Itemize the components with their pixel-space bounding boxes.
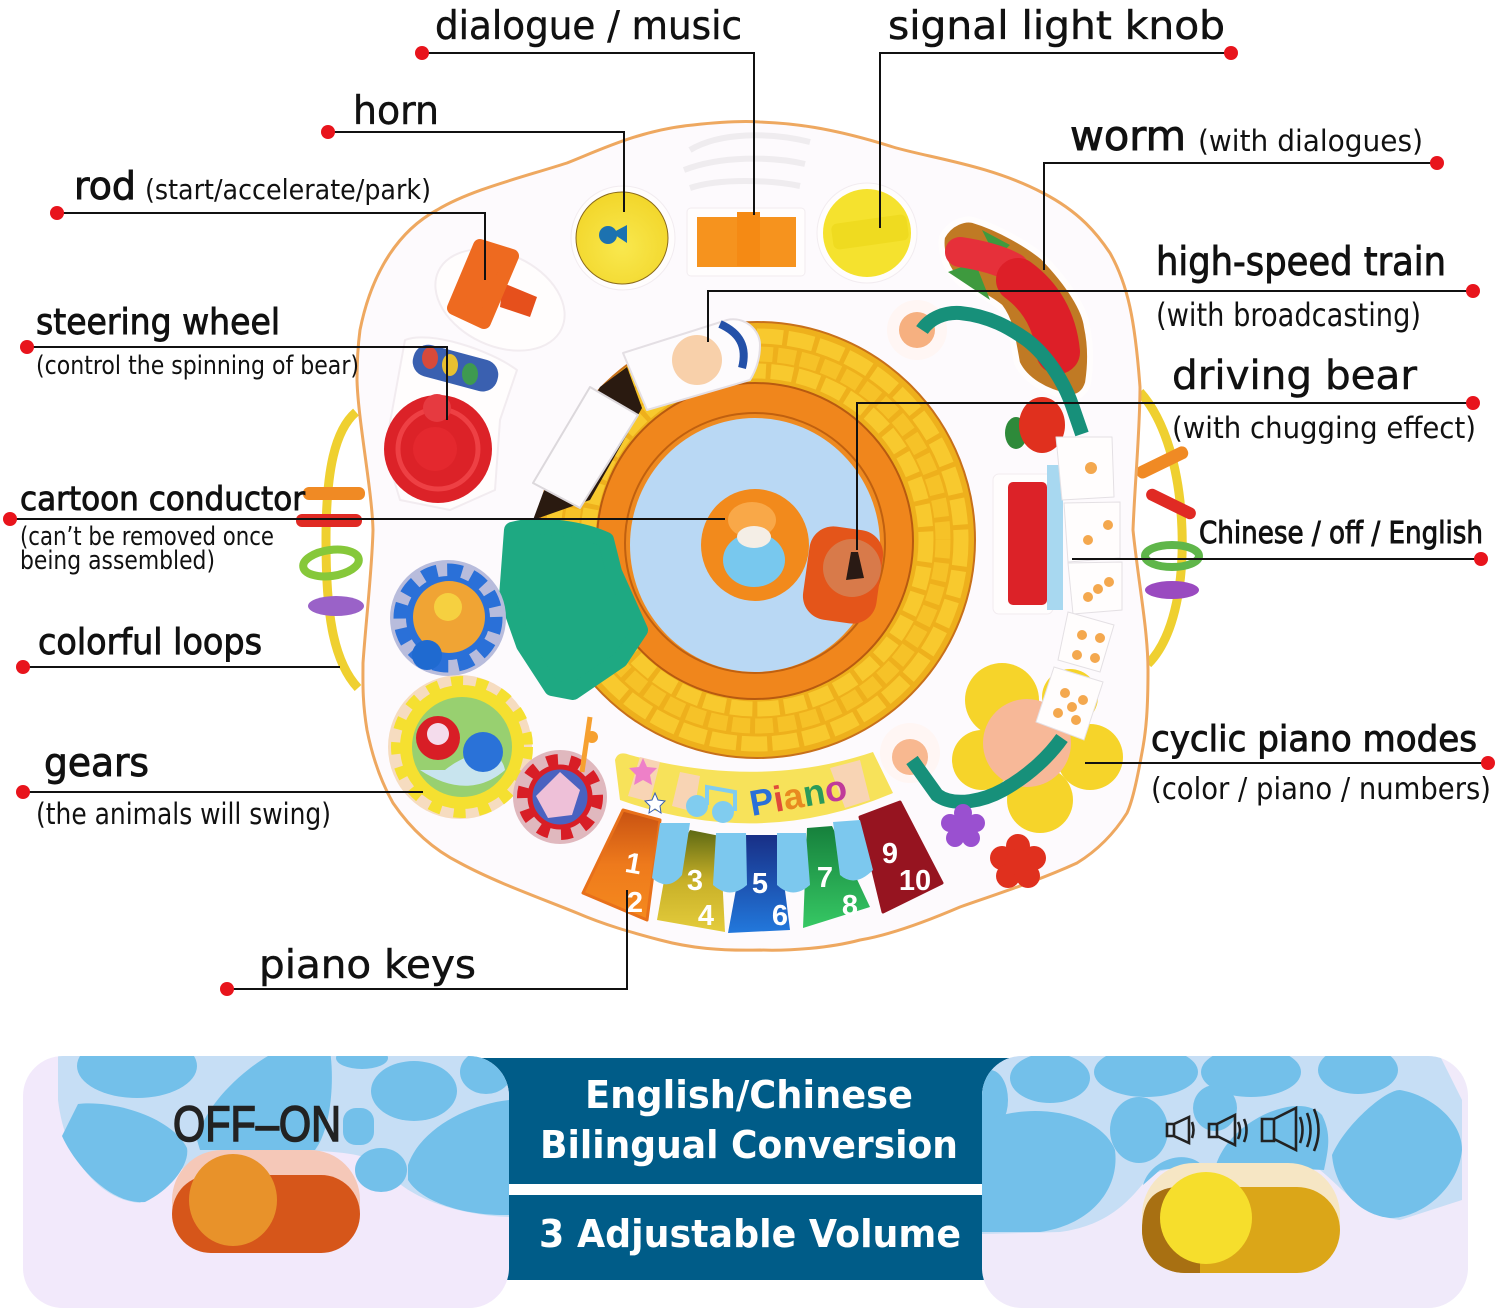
label: worm [1070, 112, 1423, 160]
label: horn: horn [353, 89, 439, 134]
key numbers: 4 [698, 900, 714, 932]
table body [357, 122, 1148, 950]
key numbers: 5 [752, 868, 768, 900]
label: driving bear: (with chugging effect) [1172, 411, 1476, 445]
toy table illustration [296, 122, 1199, 950]
banner: 3 adjustable volume [475, 1195, 1025, 1280]
strawberry [1005, 397, 1065, 453]
label: dialogue / music: dialogue / music [435, 4, 742, 49]
panel: volume switch [972, 1046, 1468, 1308]
label: cartoon conductor: (can’t be removed once [20, 522, 274, 552]
label: gears: gears [44, 741, 149, 786]
key numbers: 10 [899, 865, 931, 897]
language switch and dice rollers [993, 437, 1122, 672]
worm [942, 220, 1090, 397]
label: high-speed train [1156, 240, 1446, 334]
label: steering wheel: (control the spinning of bear) [36, 351, 359, 381]
dialogue / music switch [687, 208, 805, 276]
icon: volume levels [1167, 1108, 1318, 1151]
banner: 3 adjustable volume: 3 Adjustable Volume [539, 1212, 961, 1256]
key numbers: 6 [772, 900, 788, 932]
label: gears: (the animals will swing) [36, 797, 331, 831]
banner: English/Chinese bilingual conversion: Bilingual Conversion [540, 1123, 958, 1167]
label: cartoon conductor: cartoon conductor [20, 479, 305, 518]
key numbers: 7 [817, 862, 833, 894]
orange ring [597, 383, 913, 699]
train cars [533, 319, 760, 520]
label: high-speed train: high-speed train [1156, 240, 1446, 285]
piano label [615, 752, 893, 824]
steering wheel [384, 337, 517, 510]
banner: English/Chinese bilingual conversion: English/Chinese [585, 1073, 913, 1117]
rod [419, 230, 581, 370]
label: steering wheel [36, 302, 359, 381]
panel: off-on switch [23, 1034, 512, 1308]
train track ring [539, 322, 975, 758]
gears [388, 560, 607, 844]
horn button [571, 186, 675, 290]
label: high-speed train: (with broadcasting) [1156, 296, 1421, 334]
key numbers [623, 838, 931, 932]
text: Piano: Piano [746, 766, 850, 824]
label: colorful loops: colorful loops [38, 622, 262, 663]
label: piano keys: piano keys [259, 943, 476, 988]
piano keys [583, 802, 942, 933]
key numbers: 8 [842, 890, 858, 922]
label: cyclic piano modes [1151, 719, 1491, 807]
label: rod: rod [74, 164, 136, 208]
text: OFF-ON: OFF–ON [173, 1096, 341, 1152]
switch slot [172, 1150, 360, 1253]
label: steering wheel: steering wheel [36, 302, 280, 343]
label: cartoon conductor: being assembled) [20, 546, 215, 576]
green wire top [887, 300, 1082, 434]
side handles with loops [296, 392, 1199, 688]
switch slot [1142, 1163, 1340, 1273]
label: cyclic piano modes: cyclic piano modes [1151, 719, 1477, 760]
label: cartoon conductor [20, 479, 305, 576]
label: worm: worm [1070, 112, 1186, 160]
key numbers: 2 [627, 887, 643, 919]
key numbers: 1 [623, 847, 644, 881]
label: driving bear [1172, 353, 1476, 445]
callout lines [3, 46, 1495, 996]
cartoon conductor [701, 489, 809, 601]
label: driving bear: driving bear [1172, 353, 1418, 399]
flower [880, 663, 1123, 888]
banner: English/Chinese bilingual conversion [475, 1058, 1025, 1184]
key numbers: 3 [687, 865, 703, 897]
label: signal light knob: signal light knob [888, 4, 1225, 49]
signal light knob [817, 183, 917, 283]
label: gears [36, 741, 331, 831]
embossed music notes [684, 135, 810, 188]
label: rod: (start/accelerate/park) [145, 173, 431, 206]
label: rod [74, 164, 431, 208]
driving bear car [800, 523, 886, 627]
key numbers: 9 [882, 838, 898, 870]
label: worm: (with dialogues) [1198, 124, 1423, 158]
green tunnel [507, 527, 640, 692]
